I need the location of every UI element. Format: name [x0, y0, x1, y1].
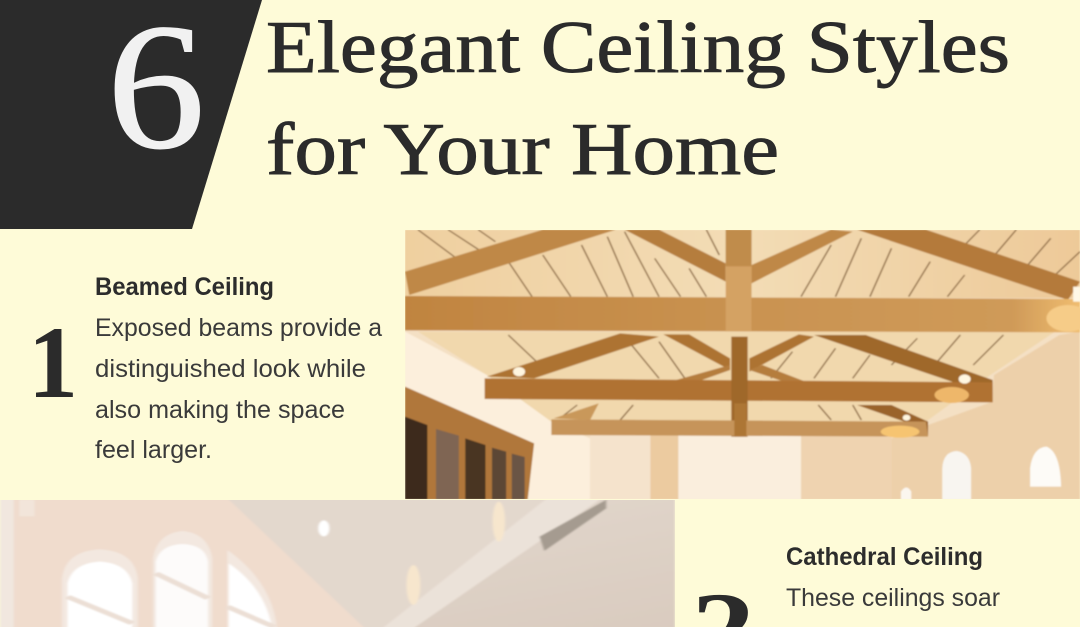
- description: beamed ceiling: [95, 314, 382, 464]
- number 1: 1: [28, 306, 78, 420]
- cabinet: [405, 387, 534, 500]
- arched windows: [942, 451, 971, 500]
- photo: beamed ceiling: [405, 230, 1080, 499]
- sloped ceiling: [224, 495, 551, 627]
- title: Elegant Ceiling Styles: [266, 7, 1010, 89]
- description: cathedral ceiling: These ceilings soar: [786, 584, 1000, 612]
- upper rafters: [405, 230, 616, 295]
- diagonal beam: [382, 495, 606, 627]
- panel: beamed ceiling text: [28, 273, 382, 464]
- lights: [318, 520, 329, 536]
- arched windows: [62, 549, 138, 627]
- badge: number 6 on dark slanted shape: [0, 0, 262, 229]
- title: for Your Home: [266, 109, 779, 191]
- ceiling planks: [405, 230, 1080, 298]
- panel: cathedral ceiling text: [691, 543, 1000, 627]
- description: beamed ceiling: Exposed beams provide a: [95, 314, 382, 342]
- heading: cathedral ceiling: Cathedral Ceiling: [786, 543, 983, 571]
- heading: beamed ceiling: Beamed Ceiling: [95, 273, 274, 301]
- description: beamed ceiling: distinguished look while: [95, 355, 366, 383]
- main beam 1: [405, 296, 1080, 332]
- title: [266, 7, 1010, 191]
- walls: [405, 332, 590, 500]
- lower rafters: [487, 333, 659, 378]
- main beam 2: [485, 378, 993, 402]
- left wall: [0, 495, 365, 627]
- description: cathedral ceiling: [786, 584, 1000, 627]
- vent: [539, 500, 606, 551]
- back rafters: [554, 403, 599, 420]
- description: beamed ceiling: also making the space: [95, 396, 345, 424]
- photo: cathedral ceiling: [0, 500, 675, 627]
- description: beamed ceiling: feel larger.: [95, 436, 212, 464]
- lamps glow: [881, 426, 919, 438]
- main beam 3: [551, 419, 928, 437]
